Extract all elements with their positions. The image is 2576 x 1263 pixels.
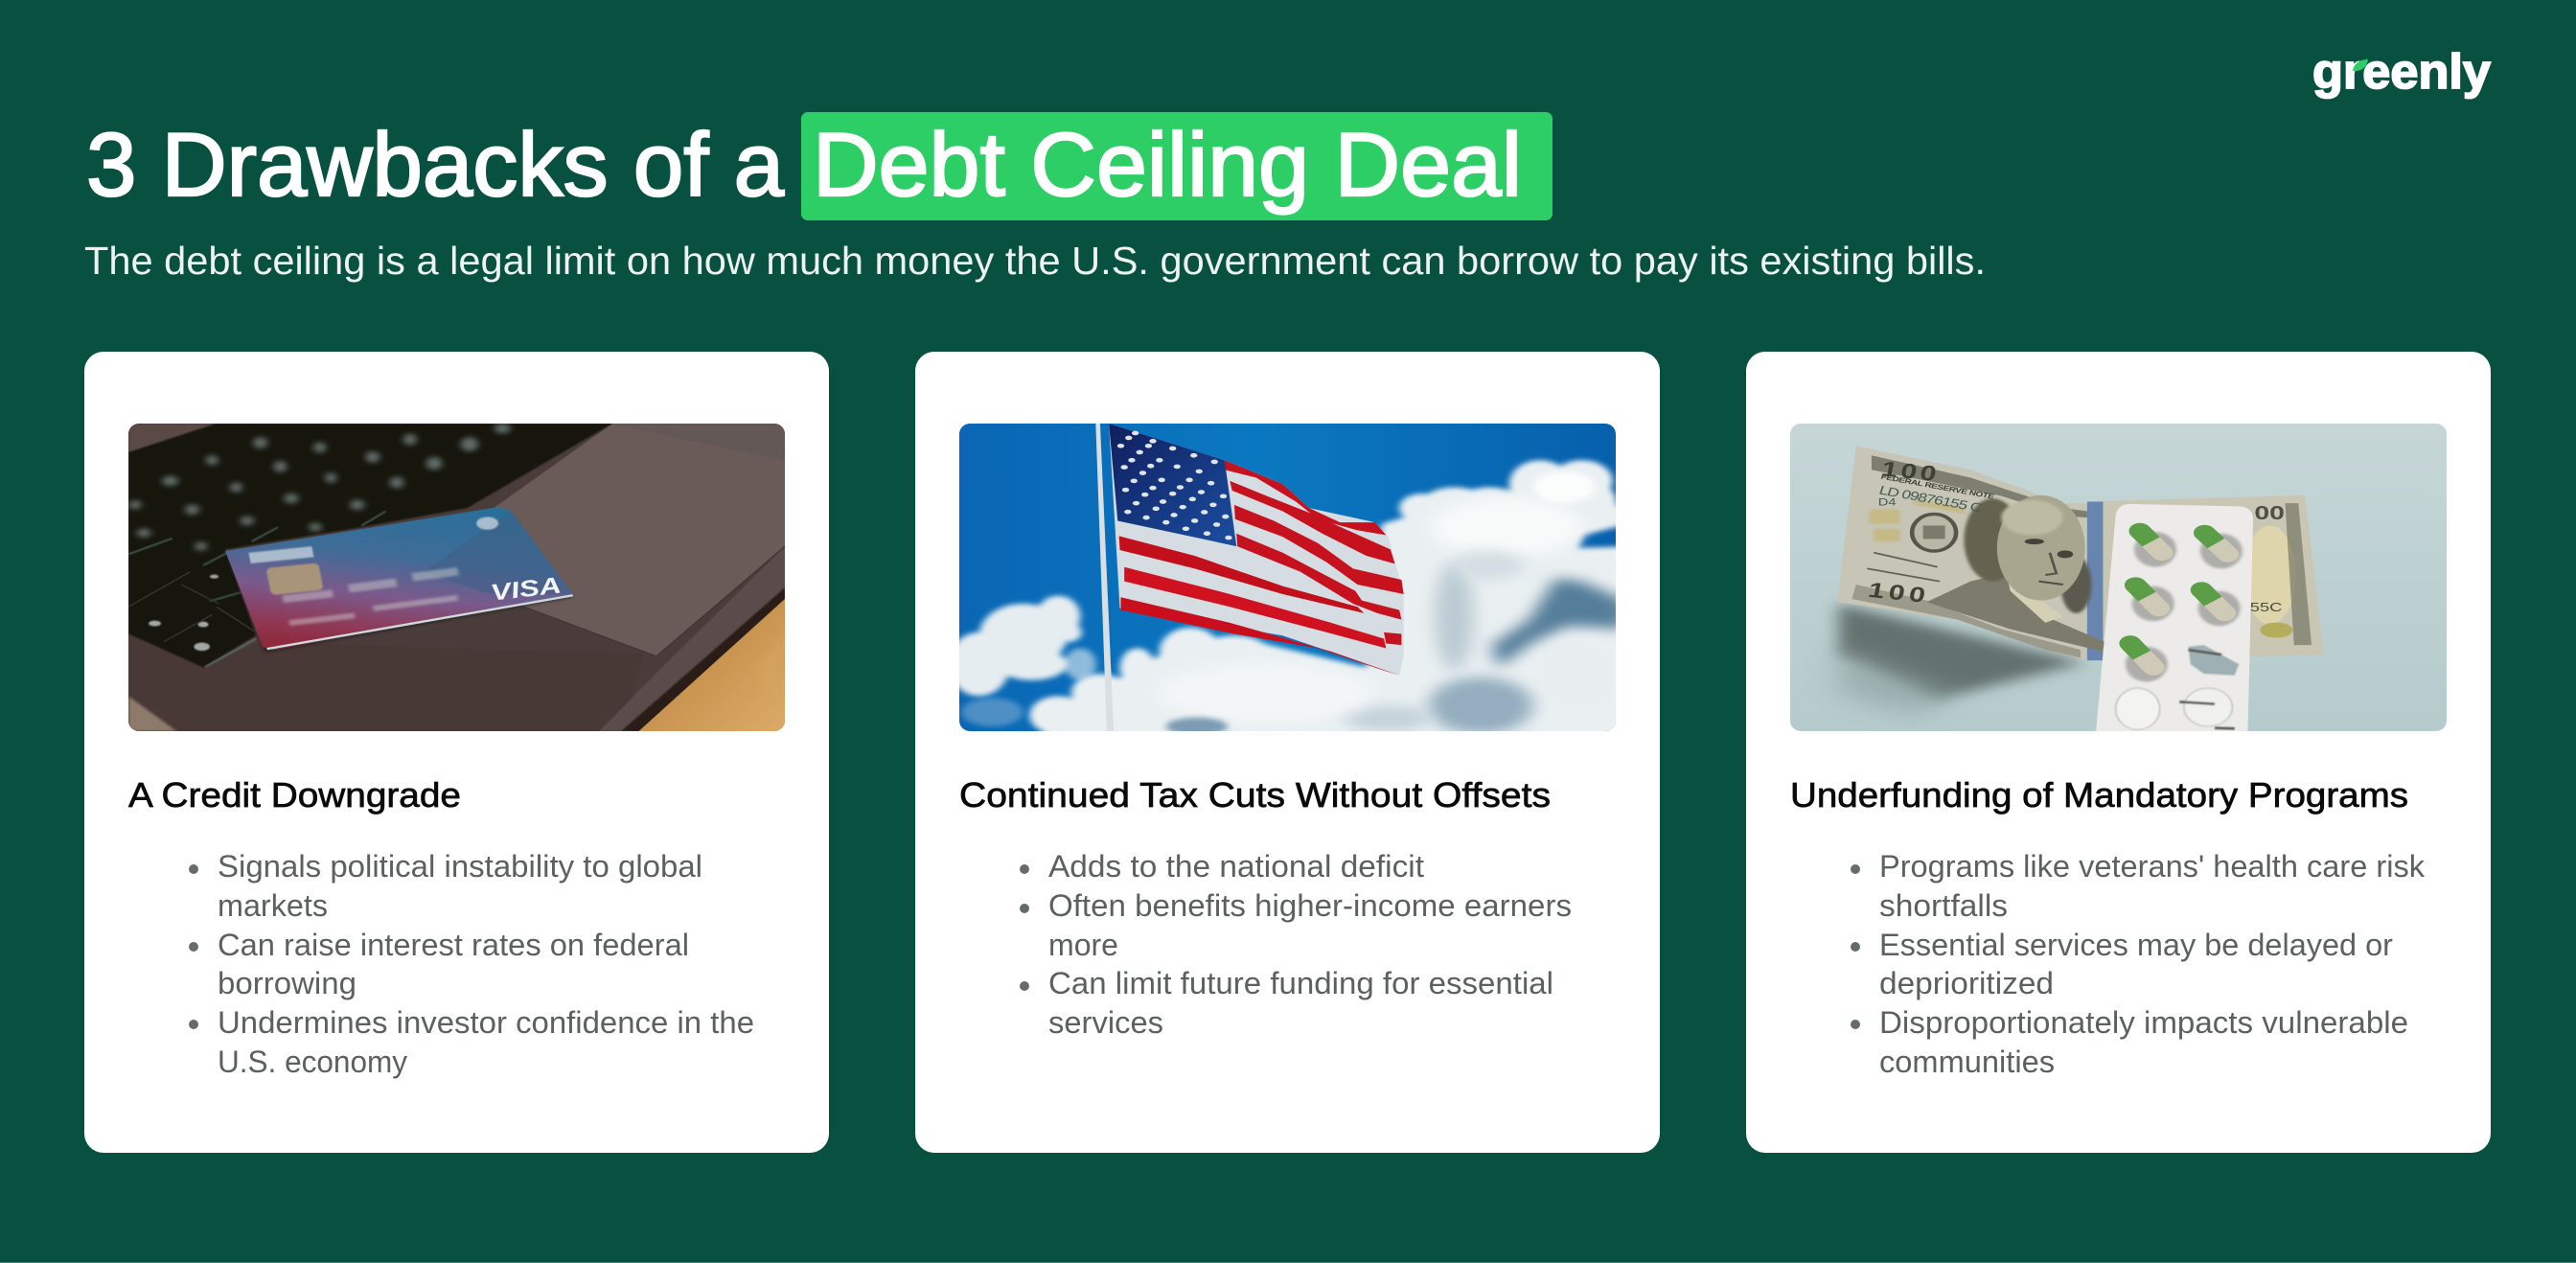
- title: [86, 112, 1552, 220]
- bullet list: Adds to the national deficit: [1048, 849, 1424, 884]
- flag: [1109, 424, 1404, 676]
- photo: hundred dollar bill and pills: [1790, 424, 2447, 731]
- bullet list: borrowing: [218, 966, 356, 1000]
- banknote: D4: [1878, 496, 1897, 508]
- panel: a credit downgrade: [84, 352, 829, 1153]
- bullet list: Can limit future funding for essential: [1048, 966, 1553, 1000]
- banknote: 100: [1879, 457, 1939, 486]
- capsules: [2130, 531, 2228, 667]
- flag pole: [1095, 424, 1114, 731]
- credit card: VISA: [489, 573, 564, 606]
- panel: continued tax cuts: [915, 352, 1660, 1153]
- bullet list: U.S. economy: [218, 1045, 407, 1079]
- banknote: 55C: [2250, 601, 2282, 615]
- bullet list: deprioritized: [1879, 966, 2054, 1000]
- bullet list: services: [1048, 1005, 1163, 1040]
- bullet list: Signals political instability to global: [218, 849, 702, 884]
- bullet list: [1851, 849, 2426, 1079]
- bullet list: Undermines investor confidence in the: [218, 1005, 754, 1040]
- bullet list: more: [1048, 928, 1118, 962]
- bullet list: [189, 849, 754, 1079]
- bullet list: Often benefits higher-income earners: [1048, 888, 1572, 923]
- bullet list: markets: [218, 888, 328, 923]
- heading: A Credit Downgrade: [128, 775, 461, 815]
- banknote: FEDERAL RESERVE NOTE: [1880, 472, 1996, 501]
- photo: american flag and clouds: [949, 424, 1635, 750]
- heading: Underfunding of Mandatory Programs: [1790, 775, 2408, 815]
- icon: logo leaf: [2353, 59, 2368, 71]
- logo: greenly: greenly: [2312, 44, 2492, 99]
- subtitle: The debt ceiling is a legal limit on how much money the U.S. government can borrow to pay its existing bills.: [84, 239, 1986, 283]
- title highlight: Debt Ceiling Deal: [813, 114, 1522, 215]
- credit card: [225, 507, 573, 654]
- bullet list: Essential services may be delayed or: [1879, 928, 2393, 962]
- bullet list: communities: [1879, 1045, 2055, 1079]
- title: 3 Drawbacks of a: [86, 114, 785, 215]
- heading: Continued Tax Cuts Without Offsets: [959, 775, 1551, 815]
- blister pack: [2096, 504, 2253, 731]
- bullet list: Disproportionately impacts vulnerable: [1879, 1005, 2408, 1040]
- panel: underfunding of mandatory programs: [1746, 352, 2491, 1153]
- portrait: [1926, 495, 2104, 652]
- bullet list: shortfalls: [1879, 888, 2008, 923]
- bullet list: Programs like veterans' health care risk: [1879, 849, 2426, 884]
- large cloud: [1024, 460, 1635, 750]
- banknote: 00: [2254, 502, 2285, 524]
- bullet list: [1020, 849, 1572, 1040]
- banknote: [1837, 446, 2323, 660]
- bullet list: Can raise interest rates on federal: [218, 928, 689, 962]
- photo: credit card on laptop: [128, 424, 785, 731]
- banknote: LD 09876155 C: [1877, 484, 1984, 516]
- banknote: 100: [1866, 578, 1927, 608]
- left cloud: [949, 596, 1096, 726]
